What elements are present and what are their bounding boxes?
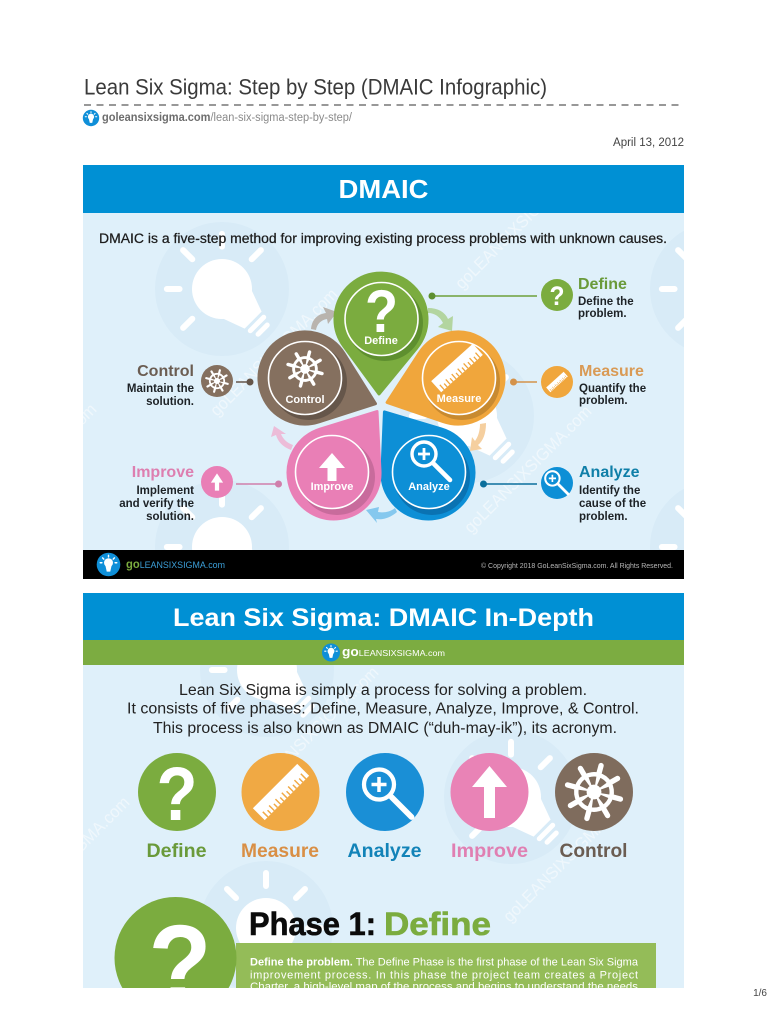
intro text: This process is also known as DMAIC (“duh-may-ik”), its acronym. xyxy=(153,720,617,737)
intro sentence: DMAIC is a five-step method for improving existing process problems with unknown causes. xyxy=(99,231,667,246)
heading: DMAIC xyxy=(338,174,429,204)
phase: define: Define xyxy=(146,841,206,862)
header: DMAIC xyxy=(83,165,684,213)
callout: control: Control xyxy=(137,363,194,380)
date: April 13, 2012 xyxy=(613,137,684,149)
copyright: © Copyright 2018 GoLeanSixSigma.com. All Rights Reserved. xyxy=(481,561,673,570)
petal: analyze xyxy=(347,385,492,537)
source link xyxy=(83,110,353,126)
phase: analyze xyxy=(346,753,424,862)
callout: improve: Improve xyxy=(132,464,194,481)
panel: DMAIC overview: goLEANSIXSIGMA.com xyxy=(460,402,595,537)
green logo band xyxy=(83,640,684,665)
callout: define: problem. xyxy=(578,308,627,320)
callout: analyze xyxy=(480,464,646,523)
petal: measure xyxy=(372,320,516,446)
callout: improve xyxy=(119,464,282,523)
arrow: measure to analyze xyxy=(470,423,486,451)
phase 1 text box xyxy=(236,943,656,993)
callout: define: ? xyxy=(550,281,564,311)
phase 1 text box: Define the problem. The Define Phase is the first phase of the Lean Six Sigma xyxy=(250,956,639,968)
petal: define xyxy=(333,272,428,395)
callout: analyze: problem. xyxy=(579,511,628,523)
panel: DMAIC in-depth xyxy=(83,593,684,988)
icon: site logo xyxy=(83,110,99,126)
icon: footer logo xyxy=(97,553,120,576)
arrow: analyze to improve xyxy=(366,507,397,523)
source domain and path: goleansixsigma.com/lean-six-sigma-step-by-step/ xyxy=(102,112,353,124)
label: Improve xyxy=(311,481,353,493)
icon: ruler xyxy=(431,344,483,392)
heading: Lean Six Sigma: DMAIC In-Depth xyxy=(173,604,594,632)
phase: control xyxy=(555,753,633,862)
footer brand: goLEANSIXSIGMA.com xyxy=(126,557,225,571)
callout: measure: Measure xyxy=(579,363,644,380)
callout: control xyxy=(127,363,254,408)
phase 1 heading: Define xyxy=(384,906,491,942)
label: Define xyxy=(364,335,398,347)
label: Measure xyxy=(437,393,481,405)
phase: analyze: Analyze xyxy=(348,841,422,862)
page title: Lean Six Sigma: Step by Step (DMAIC Infographic) xyxy=(84,74,547,100)
callout: define: Define the xyxy=(578,296,634,308)
phase: define: ? xyxy=(156,752,198,837)
intro text xyxy=(127,682,639,737)
phase 1 text box: improvement process. In this phase the project team creates a Project xyxy=(250,970,638,982)
icon: magnifier xyxy=(412,442,450,480)
callout: measure xyxy=(510,363,646,407)
intro text: Lean Six Sigma is simply a process for solving a problem. xyxy=(179,682,587,699)
panel: DMAIC in-depth: goLEANSIXSIGMA.com xyxy=(0,793,133,928)
petal: improve xyxy=(270,385,415,537)
icon: up arrow xyxy=(319,453,345,481)
panel: DMAIC overview: goLEANSIXSIGMA.com xyxy=(206,285,341,420)
icon: question mark: ? xyxy=(365,278,398,345)
header: in-depth xyxy=(83,593,684,640)
callout: improve: and verify the xyxy=(119,498,194,510)
callout: control: solution. xyxy=(146,396,194,408)
phase: measure xyxy=(241,753,320,862)
phase 1 heading: Phase 1: xyxy=(249,906,376,942)
page number: 1/6 xyxy=(753,988,767,999)
label: Analyze xyxy=(408,481,450,493)
arrow: define to measure xyxy=(428,308,453,331)
arrow: improve to control xyxy=(271,426,293,450)
callout: improve: solution. xyxy=(146,511,194,523)
panel: DMAIC in-depth: goLEANSIXSIGMA.com xyxy=(499,791,634,926)
intro text: It consists of five phases: Define, Measure, Analyze, Improve, & Control. xyxy=(127,700,639,718)
phase 1 heading xyxy=(250,911,490,936)
phase: improve: Improve xyxy=(451,841,528,862)
panel: DMAIC overview: goLEANSIXSIGMA.com xyxy=(451,158,586,293)
panel: DMAIC in-depth: goLEANSIXSIGMA.com xyxy=(247,663,382,798)
icon: large question mark circle: ? xyxy=(148,903,212,1024)
phase: control: Control xyxy=(560,841,628,862)
icon: ship wheel xyxy=(283,347,327,391)
callout: define xyxy=(428,276,634,320)
green logo band: goLEANSIXSIGMA.com xyxy=(342,644,445,659)
phase: measure: Measure xyxy=(241,841,319,862)
callout: improve: Implement xyxy=(136,485,194,497)
phase 1 text box: Charter, a high-level map of the process and begins to understand the needs xyxy=(250,981,639,993)
panel: DMAIC overview xyxy=(83,165,684,579)
callout: analyze: Analyze xyxy=(579,464,640,481)
callout: measure: problem. xyxy=(579,395,628,407)
label: Control xyxy=(285,394,325,406)
callout: control: Maintain the xyxy=(127,383,194,395)
arrow: control to define xyxy=(311,307,337,330)
icon: large question mark circle xyxy=(114,897,236,988)
callout: analyze: Identify the xyxy=(579,485,640,497)
petal: control xyxy=(246,319,391,447)
phase: improve xyxy=(450,753,528,862)
footer bar xyxy=(83,550,684,579)
callout: analyze: cause of the xyxy=(579,498,646,510)
phase: define xyxy=(138,752,216,862)
callout: measure: Quantify the xyxy=(579,383,646,395)
callout: define: Define xyxy=(578,276,627,293)
